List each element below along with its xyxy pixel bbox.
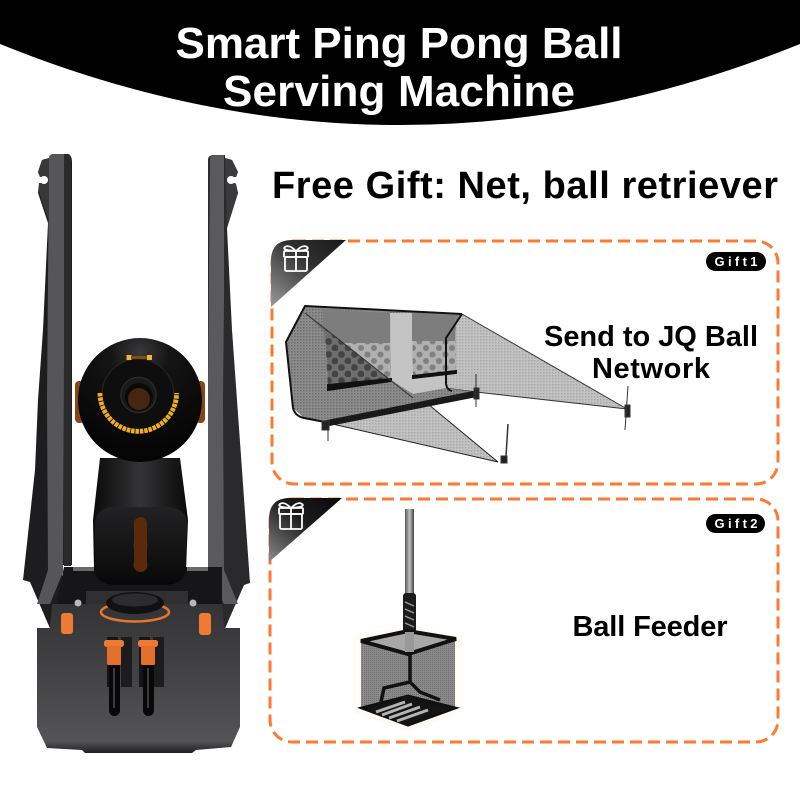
screws [74,600,82,606]
gift 2 tag [706,514,765,533]
LED ring [100,393,177,431]
gift corner ribbon [271,240,346,307]
title text: Serving Machine [223,67,575,116]
orange plugs [104,640,124,647]
product: ping pong serving machine [23,154,250,753]
black tubes [109,660,120,716]
ball feeder illustration [353,509,462,732]
inner dark body behind neck [52,567,222,625]
gift 1 caption: Network [592,353,711,385]
gift 2 caption: Ball Feeder [572,611,728,643]
gift 1 tag: Gift1 [714,254,758,269]
right support arm [208,155,250,633]
subheading: Free Gift: Net, ball retriever [272,165,778,207]
neck [93,458,188,585]
title banner [0,0,800,125]
icon: gift box [279,503,303,529]
base [37,592,240,753]
title text: Smart Ping Pong Ball [176,19,622,68]
gift corner ribbon [269,498,342,562]
net stakes [322,374,630,463]
title text [176,19,622,116]
net illustration [286,306,630,463]
lens [121,377,156,413]
side orange buttons on head [75,381,205,423]
left support arm [23,154,72,633]
gift 1 tag [706,252,766,271]
panel: gift 1 net [271,240,778,484]
head [78,338,202,462]
slots [107,637,118,687]
gift 1 caption [544,321,758,385]
hopper ring [101,602,169,622]
gift 2 tag: Gift2 [714,516,758,531]
gift 1 caption: Send to JQ Ball [544,321,758,353]
icon: gift box [284,246,308,271]
orange side tabs [61,613,73,634]
panel: gift 2 ball feeder [269,498,778,742]
ball window [134,517,148,572]
